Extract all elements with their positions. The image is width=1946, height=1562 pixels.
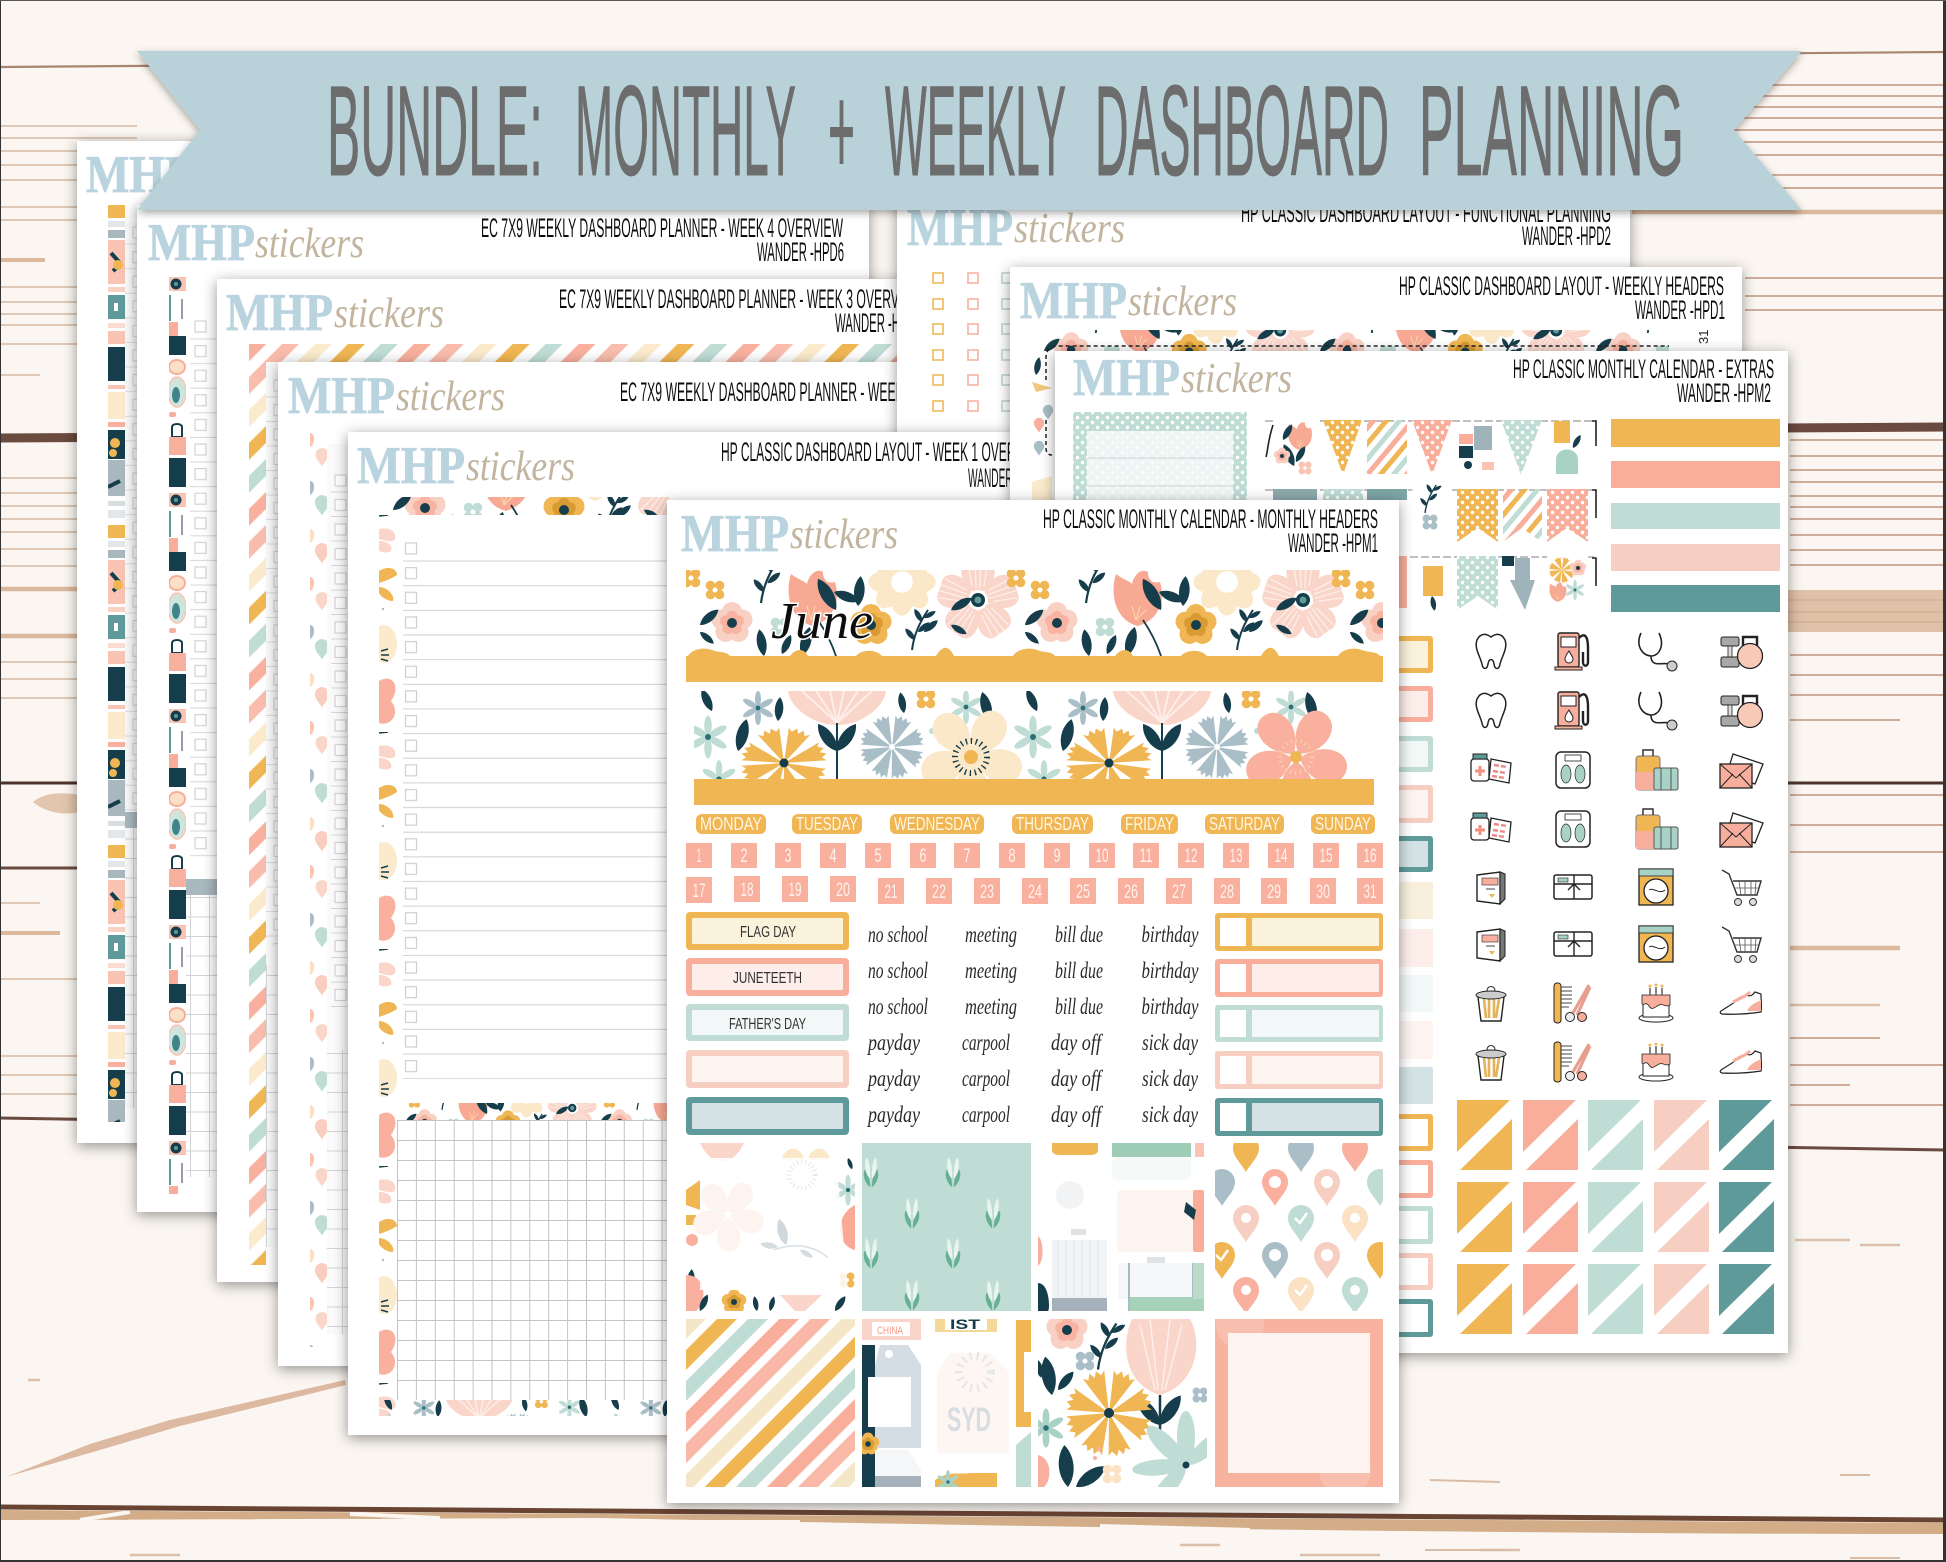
date number squares: 5 — [874, 846, 882, 867]
title banner — [137, 51, 1802, 210]
full box: faded floral frame — [686, 1143, 863, 1313]
floral divider — [406, 1103, 667, 1120]
logo: stickers — [466, 444, 575, 490]
dashed cut line and pin strip — [1032, 346, 1669, 500]
logo: MHP — [357, 437, 465, 495]
weekday labels: SUNDAY — [1315, 814, 1371, 834]
script word stickers: birthday — [1142, 994, 1199, 1019]
script word stickers: no school — [868, 994, 928, 1019]
sheet: HP classic monthly calendar extras: WANDER -HPM2 — [1677, 378, 1771, 408]
date number squares: 20 — [836, 880, 850, 901]
sheet: HP classic dashboard weekly headers: WANDER -HPD1 — [1635, 295, 1725, 325]
logo: MHP — [681, 505, 789, 563]
date number squares: 31 — [1364, 882, 1376, 903]
script word stickers: carpool — [962, 1030, 1010, 1055]
logo: stickers — [790, 512, 898, 558]
date number squares: 9 — [1054, 846, 1060, 867]
weekday labels: WEDNESDAY — [894, 814, 980, 834]
logo — [226, 284, 444, 342]
floral header strip — [1044, 330, 1669, 351]
number label 31: 31 — [1696, 330, 1711, 344]
sheet: EC 7x9 week 3 overview — [217, 279, 997, 1282]
sheet: HP classic monthly calendar monthly headers: WANDER -HPM1 — [1288, 528, 1378, 558]
script word stickers: sick day — [1142, 1102, 1199, 1127]
logo — [357, 437, 575, 495]
sheet: HP classic dashboard functional planning: WANDER -HPD2 — [1522, 221, 1611, 251]
script word stickers: bill due — [1055, 958, 1103, 983]
script word stickers: carpool — [962, 1066, 1010, 1091]
map pin strip — [310, 427, 327, 1347]
weekday labels: FRIDAY — [1125, 814, 1174, 834]
date number squares: 11 — [1140, 846, 1152, 867]
weekday labels: THURSDAY — [1016, 814, 1089, 834]
script word stickers: payday — [866, 1030, 921, 1055]
date number squares: 17 — [692, 881, 706, 902]
logo: MHP — [1020, 272, 1127, 330]
banner title text: + — [828, 60, 855, 203]
date number squares: 7 — [964, 846, 970, 867]
date number squares: 16 — [1364, 846, 1376, 867]
banner title text — [327, 60, 1684, 203]
logo — [1073, 349, 1292, 407]
logo — [681, 505, 898, 563]
date number squares: 22 — [932, 882, 946, 903]
script word stickers: day off — [1051, 1066, 1104, 1091]
script word stickers: birthday — [1142, 958, 1199, 983]
logo: stickers — [255, 221, 364, 267]
date number squares: 12 — [1184, 846, 1198, 867]
colour swatch bars — [1611, 419, 1780, 612]
date number squares: 18 — [740, 880, 754, 901]
date number squares: 4 — [830, 846, 837, 867]
weekday labels: MONDAY — [700, 814, 762, 834]
banner title text: DASHBOARD — [1095, 60, 1389, 203]
weekday labels: TUESDAY — [796, 814, 858, 834]
logo — [148, 214, 364, 272]
sheet: planner far left — [77, 141, 277, 1143]
bunting row 2 — [1265, 483, 1596, 542]
travel sticker strip — [169, 277, 186, 1194]
text: WANDER -HPD3 — [968, 463, 1046, 493]
date number squares: 3 — [784, 846, 792, 867]
date number squares: 10 — [1096, 846, 1108, 867]
checkbox columns — [933, 273, 1012, 411]
floral left strip — [379, 515, 397, 1416]
date number squares: 21 — [884, 882, 898, 903]
banner title text: MONTHLY — [575, 60, 796, 203]
date number squares: 8 — [1008, 846, 1016, 867]
script word stickers: carpool — [962, 1102, 1010, 1127]
script word stickers: meeting — [965, 994, 1017, 1019]
script word stickers: payday — [866, 1066, 921, 1091]
logo — [288, 367, 505, 425]
script word stickers: no school — [868, 922, 928, 947]
weekday labels — [696, 814, 1375, 834]
script word stickers: bill due — [1055, 922, 1103, 947]
sheet: EC 7x9 week 3 overview: EC 7X9 WEEKLY DASHBOARD PLANNER - WEEK 3 OVERVIEW — [559, 284, 922, 314]
logo: stickers — [1128, 279, 1237, 325]
floral month header with June — [686, 570, 1383, 682]
full box: luggage tags — [857, 1316, 1031, 1494]
script word stickers — [866, 922, 1199, 1127]
text: HP CLASSIC DASHBOARD LAYOUT - WEEK 1 OVERVIEW — [721, 437, 1046, 467]
polka dot frame — [1073, 412, 1247, 503]
logo — [907, 199, 1125, 257]
checklist lines — [397, 537, 667, 1079]
full box: mint sprouts — [862, 1143, 1031, 1311]
holiday label stickers: FLAG DAY — [740, 924, 796, 941]
sheet title — [559, 284, 922, 338]
full box: luggage tags: CHINA — [877, 1325, 903, 1337]
date number squares: 27 — [1172, 882, 1186, 903]
floral top strip — [393, 497, 669, 515]
date number squares: 26 — [1124, 882, 1138, 903]
script word stickers: sick day — [1142, 1030, 1199, 1055]
holiday label stickers — [686, 912, 849, 1135]
logo: MHP — [288, 367, 395, 425]
date number squares: 14 — [1274, 846, 1288, 867]
logo: MHP — [226, 284, 333, 342]
logo: stickers — [1014, 206, 1125, 252]
diagonal stripe border — [249, 344, 969, 1265]
bunting row 3 — [1399, 556, 1596, 611]
notes grid — [397, 1120, 667, 1400]
half box triangle stickers — [1457, 1100, 1774, 1334]
bunting row 1 — [1265, 420, 1596, 475]
sheet title — [721, 437, 1046, 493]
full box: floral — [1038, 1319, 1207, 1487]
text: EC 7X9 WEEKLY DASHBOARD PLANNER - WEEK 4 OVERVIEW — [481, 213, 843, 243]
sheet: EC 7x9 week 4 overview — [137, 205, 869, 1212]
checklist header stickers — [1215, 913, 1383, 1136]
banner title text: WEEKLY — [885, 60, 1066, 203]
date number squares: 24 — [1028, 882, 1042, 903]
holiday label stickers: JUNETEETH — [733, 970, 802, 987]
date number squares: 19 — [788, 880, 802, 901]
sheet: HP classic monthly calendar extras — [1055, 349, 1788, 1353]
date number squares: 2 — [740, 846, 748, 867]
full box: luggage — [1038, 1143, 1207, 1311]
script word stickers: day off — [1051, 1030, 1104, 1055]
sheet: HP classic monthly calendar monthly headers: HP CLASSIC MONTHLY CALENDAR - MONTHLY HEADERS — [1043, 504, 1378, 534]
logo: MHP — [1073, 349, 1180, 407]
logo: stickers — [334, 291, 444, 337]
logo: stickers — [396, 374, 505, 420]
full box: luggage tags: SYD — [947, 1401, 991, 1439]
floral month header with June: June — [771, 593, 873, 650]
script word stickers: no school — [868, 958, 928, 983]
script word stickers: day off — [1051, 1102, 1104, 1127]
checklist panel edge — [327, 444, 357, 1334]
sheet title — [1043, 504, 1378, 558]
sheet: HP classic monthly calendar monthly headers — [658, 494, 1408, 1516]
banner title text: BUNDLE: — [327, 60, 543, 203]
date number squares: 15 — [1320, 846, 1332, 867]
date number squares: 25 — [1076, 882, 1090, 903]
script word stickers: birthday — [1142, 922, 1199, 947]
logo — [1020, 272, 1237, 330]
floral week header — [688, 687, 1374, 809]
date number squares: 6 — [920, 846, 926, 867]
checklist panel edge — [266, 362, 286, 1247]
script word stickers: sick day — [1142, 1066, 1199, 1091]
sheet: EC 7x9 week 2 overview — [278, 362, 998, 1366]
logo on far left sheet: MHP — [86, 146, 193, 204]
logo: stickers — [1181, 356, 1292, 402]
full box: map pins — [1215, 1143, 1383, 1311]
checklist panel — [186, 290, 226, 1180]
label column peeking behind monthly sheet — [1395, 636, 1433, 1337]
sheet: HP classic dashboard functional planning — [897, 190, 1630, 690]
full box: luggage tags: IST — [950, 1316, 981, 1332]
script word stickers: bill due — [1055, 994, 1103, 1019]
text: EC 7X9 WEEKLY DASHBOARD PLANNER - WEEK 2 OVERVIEW — [620, 377, 983, 407]
date number squares: 13 — [1230, 846, 1242, 867]
icon grid: appointment and errand doodles — [1471, 633, 1763, 1082]
sheet: HP classic dashboard weekly headers — [1000, 260, 1752, 500]
sheet: HP classic dashboard week 1 overview — [348, 432, 1046, 1473]
date number squares: 23 — [980, 882, 994, 903]
floral bottom strip — [384, 1400, 667, 1416]
holiday label stickers: FATHER'S DAY — [729, 1016, 806, 1033]
sheet: EC 7x9 week 3 overview: WANDER -HPD5 — [835, 308, 922, 338]
full box: salmon frame — [1215, 1319, 1383, 1487]
weekday labels: SATURDAY — [1209, 814, 1280, 834]
date number squares: 28 — [1220, 882, 1234, 903]
script word stickers: payday — [866, 1102, 921, 1127]
logo: MHP — [907, 199, 1013, 257]
logo: MHP — [148, 214, 255, 272]
full box: diagonal stripes — [686, 1319, 855, 1487]
sheet title — [1513, 354, 1774, 408]
date number squares — [686, 843, 1383, 904]
sheet title — [1399, 271, 1725, 325]
script word stickers: meeting — [965, 958, 1017, 983]
date number squares: 29 — [1267, 882, 1281, 903]
date number squares: 1 — [696, 846, 702, 867]
sheet title — [1241, 198, 1611, 251]
decorative city sticker strip — [108, 205, 125, 1122]
panel: far left sheet checklist edge — [125, 222, 145, 1108]
sheet: EC 7x9 week 4 overview: WANDER -HPD6 — [757, 237, 844, 267]
sheet title — [481, 213, 844, 267]
date number squares: 30 — [1316, 882, 1330, 903]
script word stickers: meeting — [965, 922, 1017, 947]
